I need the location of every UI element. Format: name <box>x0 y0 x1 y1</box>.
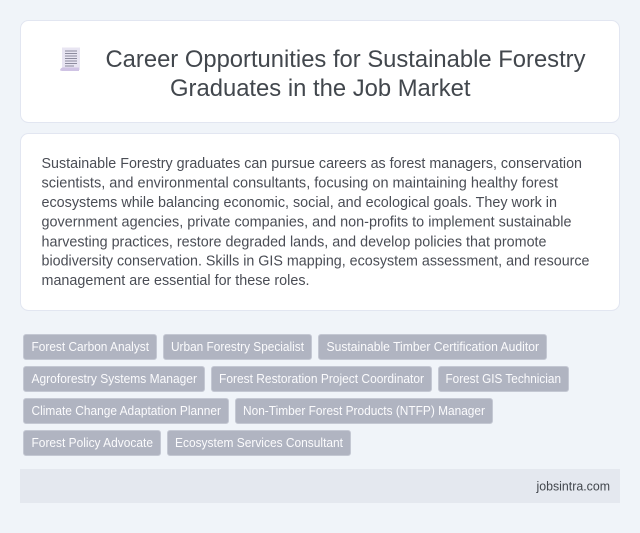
tag: Forest Policy Advocate <box>24 430 160 456</box>
tag: Forest GIS Technician: Forest GIS Technician <box>446 372 561 386</box>
tag: Ecosystem Services Consultant <box>168 430 350 456</box>
tag: Non-Timber Forest Products (NTFP) Manager: Non-Timber Forest Products (NTFP) Manager <box>243 404 485 418</box>
text block: description: ecosystems while balancing economic, social, and ecological goals. They work in <box>42 195 557 211</box>
icon: document scroll <box>60 48 80 71</box>
tag: Ecosystem Services Consultant: Ecosystem Services Consultant <box>175 436 344 450</box>
text block: description: biodiversity conservation. Skills in GIS mapping, ecosystem assessment, and resource <box>42 254 590 270</box>
footer text: source: jobsintra.com <box>536 480 610 494</box>
tag: Forest GIS Technician <box>438 366 568 392</box>
panel: title card <box>20 20 620 122</box>
text block: description: Sustainable Forestry graduates can pursue careers as forest managers, conservation <box>42 156 582 172</box>
text block: description <box>42 156 590 289</box>
text block: description: scientists, and environmental consultants, focusing on maintaining healthy forest <box>42 176 558 192</box>
footer bar <box>20 469 620 503</box>
panel: career tags <box>24 334 568 456</box>
text block: description: harvesting practices, restore degraded lands, and develop policies that promote <box>42 234 546 250</box>
tag: Agroforestry Systems Manager: Agroforestry Systems Manager <box>32 372 197 386</box>
heading <box>106 46 586 102</box>
tag: Climate Change Adaptation Planner: Climate Change Adaptation Planner <box>32 404 221 418</box>
tag: Non-Timber Forest Products (NTFP) Manager <box>236 398 492 424</box>
tag: Forest Carbon Analyst: Forest Carbon Analyst <box>32 340 149 354</box>
tag: Urban Forestry Specialist <box>164 334 312 360</box>
tag: Agroforestry Systems Manager <box>24 366 204 392</box>
heading: Career Opportunities for Sustainable Forestry <box>106 46 586 73</box>
text block: description: management are essential for these roles. <box>42 273 310 289</box>
tag: Urban Forestry Specialist: Urban Forestry Specialist <box>171 340 304 354</box>
tag: Forest Carbon Analyst <box>24 334 156 360</box>
text block: description: government agencies, private companies, and non-profits to implement sustainable <box>42 214 572 230</box>
panel: description card <box>20 134 620 310</box>
tag: Forest Restoration Project Coordinator <box>212 366 432 392</box>
tag: Sustainable Timber Certification Auditor: Sustainable Timber Certification Auditor <box>326 340 539 354</box>
tag: Climate Change Adaptation Planner <box>24 398 228 424</box>
heading: Graduates in the Job Market <box>170 75 471 102</box>
tag: Forest Restoration Project Coordinator: Forest Restoration Project Coordinator <box>219 372 424 386</box>
tag: Sustainable Timber Certification Auditor <box>318 334 546 360</box>
tag: Forest Policy Advocate: Forest Policy Advocate <box>32 436 153 450</box>
